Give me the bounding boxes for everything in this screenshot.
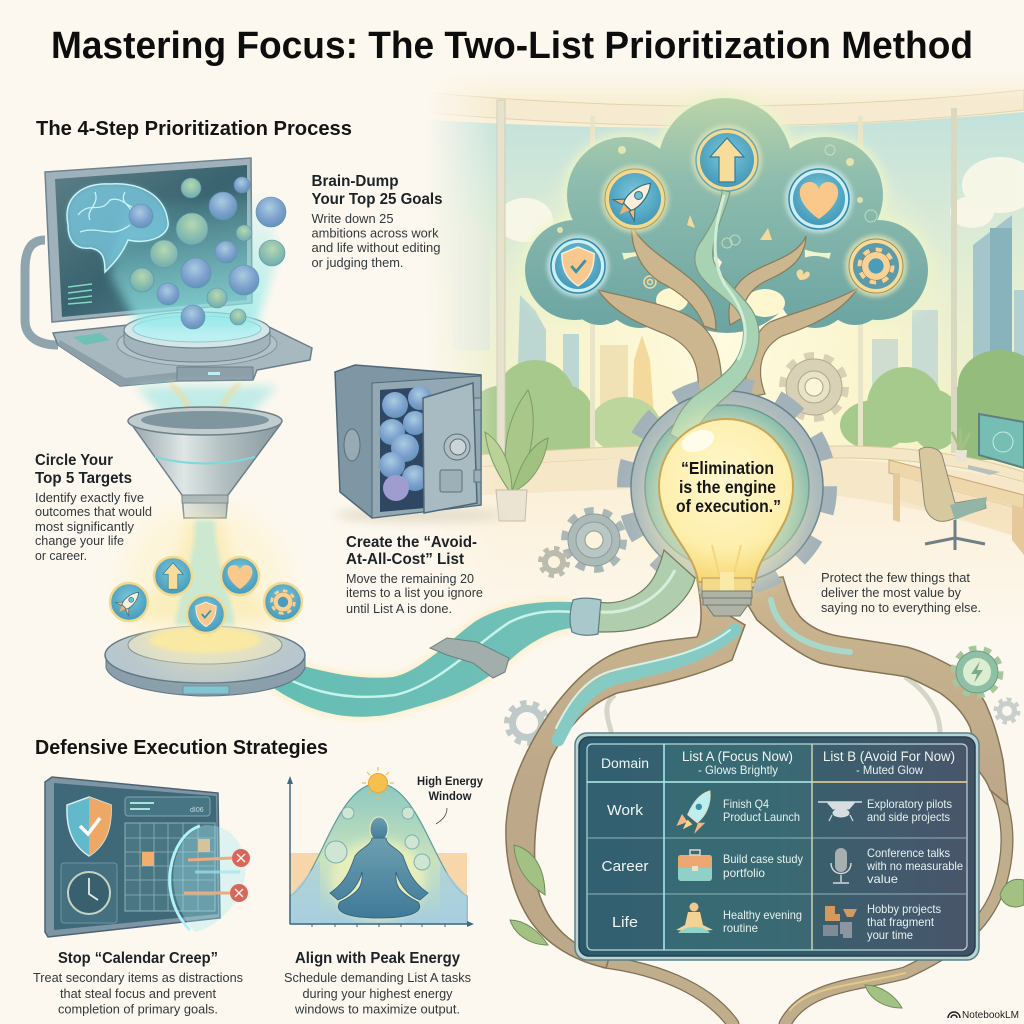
energy curve: [290, 783, 467, 924]
high energy label: High Energy: [417, 774, 483, 788]
icon: heart: [221, 557, 259, 595]
outer thin vines: [605, 780, 1007, 1024]
gear: grey left of bulb: [567, 513, 621, 567]
list B text: and side projects: [867, 810, 950, 824]
row labels: [602, 802, 648, 931]
comparison table panel: [575, 733, 979, 960]
title: Mastering Focus: The Two-List Prioritization Method: [51, 25, 973, 67]
step 3 text: until List A is done.: [346, 601, 452, 616]
beam into funnel: [135, 386, 278, 425]
icon: drone: [818, 802, 862, 821]
top bar: dI06: [190, 807, 204, 814]
leaves: [510, 845, 1024, 1008]
step 1 text: Your Top 25 Goals: [312, 191, 442, 208]
list A text: Healthy evening: [723, 908, 802, 922]
meditating person: [330, 817, 428, 918]
header row: - Muted Glow: [856, 763, 923, 777]
floating goal orbs: [129, 177, 286, 329]
ribbon highlight: [255, 611, 572, 697]
bulb highlight: [679, 426, 717, 456]
icon: gear circle: [845, 235, 907, 297]
brain hologram: [67, 184, 168, 272]
green trunk strand: [670, 190, 759, 445]
bulb filament: [712, 545, 741, 578]
root vines: [506, 577, 1008, 1024]
gear: small right grey: [996, 700, 1018, 722]
callout: protect the few things: Protect the few things that: [821, 570, 970, 585]
skyline buildings: [473, 215, 1024, 409]
step 3: vault safe: [335, 365, 505, 523]
pale arcs: [607, 677, 940, 735]
quote: is the engine: [679, 477, 776, 497]
tree branches: [598, 226, 858, 398]
step 2: target platform with five icons: [105, 505, 305, 696]
header row: List B (Avoid For Now): [823, 749, 955, 764]
strategy 2: energy chart: [287, 767, 483, 927]
step 1 text: Brain-Dump: [312, 173, 398, 190]
strategy 2 text: Schedule demanding List A tasks: [284, 970, 471, 985]
list B text: Exploratory pilots: [867, 797, 952, 811]
list B text: that fragment: [867, 915, 935, 929]
step 1 text: and life without editing: [312, 240, 440, 255]
right teal strand: [771, 600, 850, 652]
strategy 2 text: [284, 950, 471, 1016]
left root band: [506, 580, 745, 968]
list A text: Build case study: [723, 852, 803, 866]
funnel body: [128, 407, 282, 518]
section heading: 4-step process: The 4-Step Prioritization Process: [36, 118, 352, 140]
list B text: Hobby projects: [867, 902, 941, 916]
step 2 text: Top 5 Targets: [35, 470, 132, 487]
low energy bands: [290, 853, 467, 924]
decorative gears: [508, 358, 1018, 742]
list B text: [866, 797, 963, 942]
window scene background: [434, 80, 1024, 586]
step 3 text: [346, 534, 483, 616]
strategy 1 text: that steal focus and prevent: [60, 986, 216, 1001]
step 1 text: ambitions across work: [312, 226, 439, 240]
step 3 text: Create the “Avoid-: [346, 534, 477, 551]
icon: arrow circle: [692, 125, 762, 195]
list A text: Product Launch: [723, 810, 800, 824]
beam out of funnel: [135, 520, 275, 620]
strand highlight: [715, 195, 745, 360]
header row: List A (Focus Now): [682, 749, 793, 764]
icon: gear: [264, 583, 302, 621]
base: [53, 325, 312, 386]
strategy 2 text: Align with Peak Energy: [295, 950, 460, 967]
strategy 1 text: Stop “Calendar Creep”: [58, 950, 218, 967]
clouds: [497, 157, 1024, 242]
strategy 2 text: windows to maximize output.: [294, 1002, 460, 1016]
icon: shield: [187, 595, 225, 633]
platform: [105, 626, 305, 696]
bulb glow: [645, 410, 805, 590]
bushes: [465, 350, 1024, 460]
section heading: defensive strategies: Defensive Execution Strategies: [35, 737, 328, 759]
header row: [601, 749, 955, 777]
low wall and floor: [482, 458, 1024, 536]
strategy 2 text: during your highest energy: [302, 986, 453, 1001]
potted plant: [485, 390, 548, 521]
left teal strand: [556, 630, 735, 740]
step 2 text: or career.: [35, 548, 87, 563]
header row: - Glows Brightly: [698, 763, 778, 777]
callout: protect the few things: deliver the most value by: [821, 585, 961, 600]
gear: beige behind bulb: [785, 358, 843, 416]
row labels: Career: [602, 858, 648, 875]
list A text: Finish Q4: [723, 797, 769, 811]
step 1 text: or judging them.: [312, 255, 404, 270]
step 1 text: Write down 25: [312, 211, 394, 226]
step 2: funnel: [128, 383, 282, 625]
list B text: Conference talks: [867, 846, 950, 860]
tree of priorities: [521, 93, 932, 398]
label pointer: [436, 808, 447, 824]
quote: “Elimination: [681, 458, 774, 478]
top bar: [125, 797, 210, 816]
hologram beam: [110, 195, 277, 328]
table frame: [575, 733, 979, 960]
tube highlight: [600, 570, 675, 612]
connector ribbon from platform to bulb: [250, 550, 695, 717]
header row: Domain: [601, 756, 649, 771]
step 2 text: change your life: [35, 533, 124, 548]
potted desk plant: [955, 450, 967, 462]
energy gears: [325, 807, 430, 870]
high energy label: [417, 774, 483, 803]
callout: protect the few things: saying no to everything else.: [821, 600, 981, 615]
step 2 text: Identify exactly five: [35, 490, 144, 505]
list A text: [723, 797, 803, 935]
NotebookLM mark: NotebookLM: [962, 1009, 1019, 1021]
step 2 text: outcomes that would: [35, 504, 152, 519]
platform: [117, 312, 277, 366]
pipe cuff: [570, 598, 601, 635]
icon: briefcase: [678, 850, 712, 881]
list A text: portfolio: [723, 866, 765, 880]
callout: protect the few things: [821, 570, 981, 615]
stored items: [379, 386, 432, 501]
protection dome: [173, 825, 246, 932]
chair: [919, 447, 987, 550]
step 2 text: Circle Your: [35, 452, 113, 469]
icon: arrow: [154, 557, 192, 595]
clamp: [430, 638, 509, 678]
clock: [61, 863, 117, 923]
strategy 1 text: [33, 950, 243, 1016]
step 3 text: items to a list you ignore: [346, 585, 483, 600]
grid lines: [587, 744, 967, 950]
list B text: value: [867, 872, 898, 886]
blocked arrows: [184, 849, 250, 902]
high energy label: Window: [428, 789, 472, 803]
step 1: hologram device: [25, 158, 312, 386]
desk monitor: [979, 414, 1024, 468]
icon: puzzle: [823, 906, 857, 938]
step 3 text: Move the remaining 20: [346, 571, 474, 586]
green tube to bulb: [598, 550, 695, 632]
safe door: [423, 383, 477, 513]
gear: small left: [541, 549, 567, 575]
light bulb: [659, 419, 793, 582]
office desk with chair and monitor: [889, 414, 1024, 555]
calendar grid: [125, 823, 215, 911]
sun: [362, 767, 394, 799]
strategy 1: calendar tablet: [45, 777, 250, 937]
quote: [676, 458, 781, 516]
icon: rocket circle: [601, 165, 669, 233]
row labels: Work: [607, 802, 644, 819]
screen lines: [68, 284, 92, 304]
strategy 1 text: Treat secondary items as distractions: [33, 970, 243, 985]
quote: of execution.”: [676, 496, 781, 516]
icon: meditation: [676, 902, 713, 933]
icon: rocket: [676, 791, 710, 834]
icon: shield circle: [547, 235, 609, 297]
strategy 1 text: completion of primary goals.: [58, 1002, 218, 1016]
list B text: with no measurable: [866, 859, 963, 873]
icon: heart circle: [785, 165, 853, 233]
shield: [67, 797, 111, 856]
step 1 text: [312, 173, 442, 270]
bulb base: [702, 572, 752, 616]
list B text: your time: [867, 928, 913, 942]
green lightning gear: [955, 650, 999, 694]
big gear with light bulb: [629, 190, 825, 616]
gear ring: [629, 389, 825, 585]
tree canopy: [521, 93, 932, 333]
row labels: Life: [612, 914, 638, 931]
window frame: [400, 90, 1024, 482]
icon: microphone: [831, 848, 851, 883]
right root band: [745, 577, 1008, 805]
gear: left of table: [508, 704, 546, 742]
table cells: [587, 744, 967, 950]
step 2 text: [35, 452, 152, 563]
monitor: [45, 158, 252, 322]
list A text: routine: [723, 921, 758, 935]
step 2 text: most significantly: [35, 519, 134, 534]
icon: rocket: [110, 583, 148, 621]
chart axes: [287, 776, 474, 927]
step 3 text: At-All-Cost” List: [346, 551, 464, 568]
monitor handle: [25, 240, 58, 345]
